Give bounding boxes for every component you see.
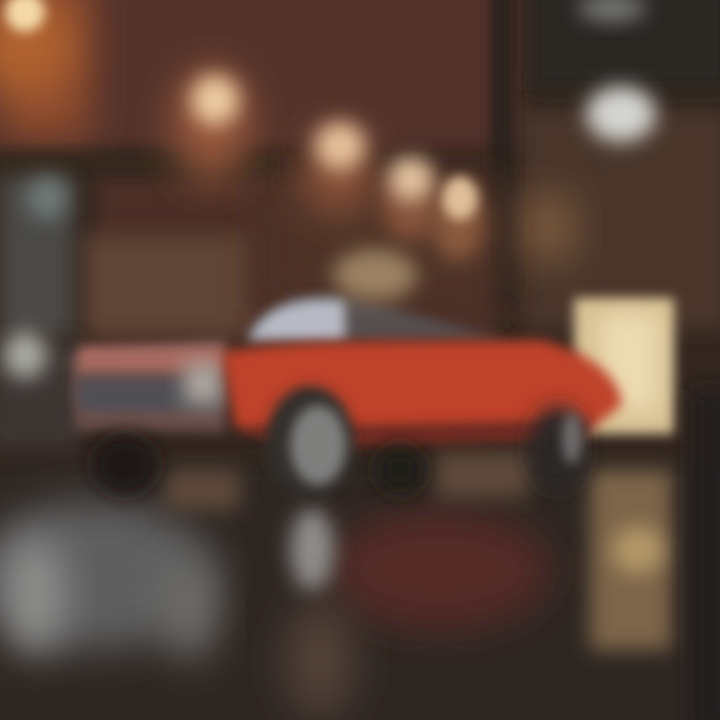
bright doorway <box>574 298 674 434</box>
luggage on roof <box>333 249 417 301</box>
wheels <box>93 435 157 495</box>
ceiling lights <box>0 0 656 261</box>
car roof and windows <box>248 295 505 340</box>
floor <box>0 390 720 720</box>
headlight glow <box>3 331 47 379</box>
car <box>3 249 622 498</box>
car front <box>70 338 225 432</box>
car body <box>222 340 622 438</box>
background: showroom walls <box>0 0 720 450</box>
